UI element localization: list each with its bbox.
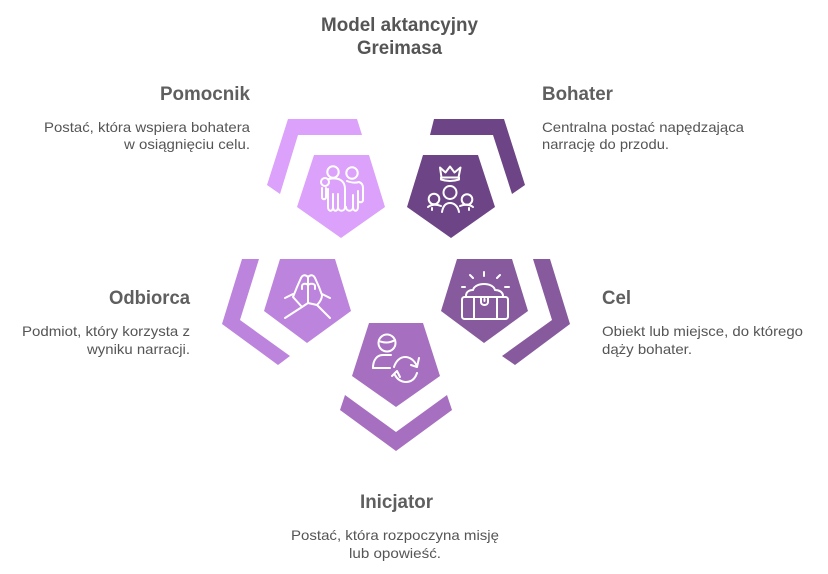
Cel description: Obiekt lub miejsce, do którego xyxy=(602,323,803,339)
Odbiorca description xyxy=(22,323,190,357)
Pomocnik pentagon xyxy=(297,155,385,238)
icon: person with cycle arrows xyxy=(373,334,419,382)
Bohater frame xyxy=(430,119,525,194)
title: Greimasa xyxy=(357,38,442,59)
Bohater heading: Bohater xyxy=(542,84,614,105)
Odbiorca description: Podmiot, który korzysta z xyxy=(22,323,190,339)
Cel heading: Cel xyxy=(602,288,631,309)
icon: crowned hero with group xyxy=(428,166,473,212)
panel: Odbiorca xyxy=(22,259,351,365)
icon: praying hands xyxy=(285,275,330,318)
Odbiorca heading: Odbiorca xyxy=(109,288,190,309)
panel: Pomocnik xyxy=(44,84,385,238)
Pomocnik heading: Pomocnik xyxy=(160,84,250,105)
Bohater pentagon xyxy=(407,155,495,238)
Cel frame xyxy=(502,259,570,365)
Pomocnik frame xyxy=(267,119,362,194)
Odbiorca frame xyxy=(222,259,290,365)
Pomocnik description: w osiągnięciu celu. xyxy=(123,136,250,152)
icon: two people helping xyxy=(321,166,363,211)
Cel description: dąży bohater. xyxy=(602,341,692,357)
panel: Inicjator xyxy=(291,323,499,561)
Odbiorca pentagon xyxy=(264,259,351,343)
panel: Cel xyxy=(441,259,803,365)
icon: treasure chest xyxy=(462,272,509,319)
Bohater description xyxy=(542,119,744,152)
Inicjator description: lub opowieść. xyxy=(349,545,441,561)
Pomocnik description xyxy=(44,119,250,152)
Inicjator description: Postać, która rozpoczyna misję xyxy=(291,527,499,543)
Cel description xyxy=(602,323,803,357)
Odbiorca description: wyniku narracji. xyxy=(86,341,190,357)
title: Model aktancyjny xyxy=(321,15,478,36)
title xyxy=(321,15,478,59)
Inicjator frame xyxy=(340,395,452,451)
Inicjator heading: Inicjator xyxy=(360,492,434,513)
panel: Bohater xyxy=(407,84,744,238)
Bohater description: narrację do przodu. xyxy=(542,136,669,152)
Inicjator description xyxy=(291,527,499,561)
Pomocnik description: Postać, która wspiera bohatera xyxy=(44,119,250,135)
Cel pentagon xyxy=(441,259,528,343)
Bohater description: Centralna postać napędzająca xyxy=(542,119,744,135)
Inicjator pentagon xyxy=(352,323,440,407)
